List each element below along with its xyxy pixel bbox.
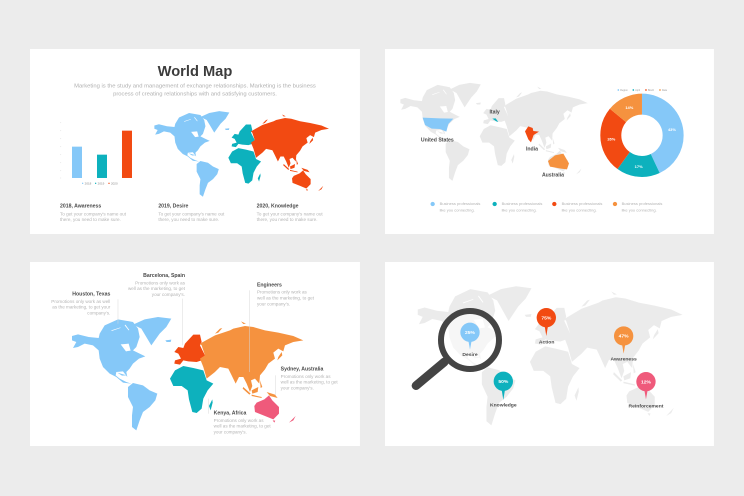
donut chart: April xyxy=(635,89,640,92)
legend xyxy=(430,201,662,213)
country: Australia xyxy=(542,154,569,178)
callout: Sydney: Promotions only work as xyxy=(281,374,331,379)
country: Italy xyxy=(489,109,500,122)
country: Italy: Italy xyxy=(489,109,500,115)
pin: Awareness: 47% xyxy=(619,333,629,339)
callout: Barcelona xyxy=(128,273,186,297)
column: 2018: 2018, Awareness xyxy=(60,203,101,209)
donut chart: Brazil xyxy=(648,89,654,92)
pin: Action: 75% xyxy=(541,315,552,321)
pin: Knowledge: Knowledge xyxy=(490,403,517,409)
donut chart: Data xyxy=(662,89,668,92)
title: World Map xyxy=(158,64,232,80)
donut chart: 26% xyxy=(607,137,616,142)
callout: Engineers: Engineers xyxy=(257,282,282,288)
country: United States: United States xyxy=(421,137,454,143)
world map: coloured continents xyxy=(72,317,303,430)
world map: grey base xyxy=(400,83,588,181)
callout: Kenya: your company's. xyxy=(214,430,247,435)
bar chart xyxy=(60,122,132,185)
column: 2018 xyxy=(60,203,127,222)
column: 2019: To get your company's name out xyxy=(158,211,225,216)
callout: Houston: company's. xyxy=(87,311,110,316)
callout: Houston: Houston, Texas xyxy=(72,292,110,298)
donut chart: 17% xyxy=(635,164,643,169)
country: India xyxy=(525,126,539,153)
pin: Reinforcement: 12% xyxy=(641,379,652,385)
legend: Business professionals xyxy=(622,201,662,206)
column: 2020: there, you need to make sure. xyxy=(257,217,317,222)
callout: Engineers: well as the marketing, to get xyxy=(257,295,315,300)
column: 2018: there, you need to make sure. xyxy=(60,217,121,222)
pin: Action: Action xyxy=(539,340,554,346)
callout: Engineers: Promotions only work as xyxy=(257,290,308,295)
column: 2020 xyxy=(257,203,323,222)
callout: Barcelona: Promotions only work as xyxy=(135,280,186,285)
bar chart: 2019 xyxy=(98,181,105,185)
legend: like you connecting. xyxy=(622,208,657,213)
country: Australia: Australia xyxy=(542,172,564,178)
country: India: India xyxy=(526,147,538,153)
legend: Business professionals xyxy=(562,201,602,206)
subtitle: Marketing is the study and management of exchange relationships. Marketing is the business xyxy=(74,84,316,90)
magnifier xyxy=(416,311,499,386)
pin: Reinforcement xyxy=(629,372,664,409)
donut chart: 43% xyxy=(668,127,676,132)
column: 2020: To get your company's name out xyxy=(257,211,323,216)
legend: like you connecting. xyxy=(562,208,597,213)
callout: Sydney: Sydney, Australia xyxy=(281,367,323,373)
callout: Houston: as the marketing, to get your xyxy=(52,305,111,310)
callout: Engineers xyxy=(257,282,315,306)
callout: Houston xyxy=(51,292,111,316)
subtitle: process of creating relationships with and satisfying customers. xyxy=(113,91,277,97)
column: 2018: To get your company's name out xyxy=(60,211,127,216)
panel: pins and magnifier xyxy=(385,262,714,446)
callout: Engineers: your company's. xyxy=(257,301,290,306)
bar chart: 2020 xyxy=(111,181,118,185)
column: 2019: 2019, Desire xyxy=(158,203,189,209)
donut chart: Region xyxy=(620,90,628,92)
panel: countries and donut xyxy=(385,49,714,234)
legend: like you connecting. xyxy=(440,208,475,213)
pin: Action xyxy=(537,308,556,346)
legend: Business professionals xyxy=(440,201,480,206)
callout: Barcelona: your company's. xyxy=(152,292,185,297)
panel: regions with callouts xyxy=(30,262,360,446)
callout: Sydney xyxy=(281,367,338,391)
donut chart: 14% xyxy=(625,105,634,110)
column: 2019: there, you need to make sure. xyxy=(158,217,219,222)
world map: grey base xyxy=(418,286,683,425)
callout: Kenya xyxy=(214,411,271,435)
pin: Awareness xyxy=(611,326,637,363)
pin: Knowledge xyxy=(490,372,517,409)
callout: Barcelona: well as the marketing, to get xyxy=(128,286,186,291)
bar chart: 2018 xyxy=(85,181,92,185)
world map: coloured regions xyxy=(154,111,329,197)
column: 2019 xyxy=(158,203,225,222)
pin: Awareness: Awareness xyxy=(611,357,637,363)
column: 2020: 2020, Knowledge xyxy=(257,203,299,209)
callout: Sydney: your company's. xyxy=(281,386,314,391)
panel: world map overview xyxy=(30,49,360,234)
country: United States xyxy=(421,118,454,143)
donut chart xyxy=(607,89,676,169)
pin: Desire: Desire xyxy=(462,352,478,358)
callout: Houston: Promotions only work as well xyxy=(51,299,110,304)
legend: like you connecting. xyxy=(502,208,537,213)
pin: Knowledge: 50% xyxy=(498,379,509,385)
callout: Barcelona: Barcelona, Spain xyxy=(143,273,185,279)
legend: Business professionals xyxy=(502,201,542,206)
pin: Desire xyxy=(460,323,480,358)
callout: Kenya: Kenya, Africa xyxy=(214,411,247,417)
callout: Kenya: well as the marketing, to get xyxy=(214,424,271,429)
callout: Kenya: Promotions only work as xyxy=(214,418,264,423)
pin: Reinforcement: Reinforcement xyxy=(629,403,664,409)
subtitle xyxy=(74,84,316,97)
callout: Sydney: well as the marketing, to get xyxy=(281,380,338,385)
pin: Desire: 25% xyxy=(465,330,476,336)
